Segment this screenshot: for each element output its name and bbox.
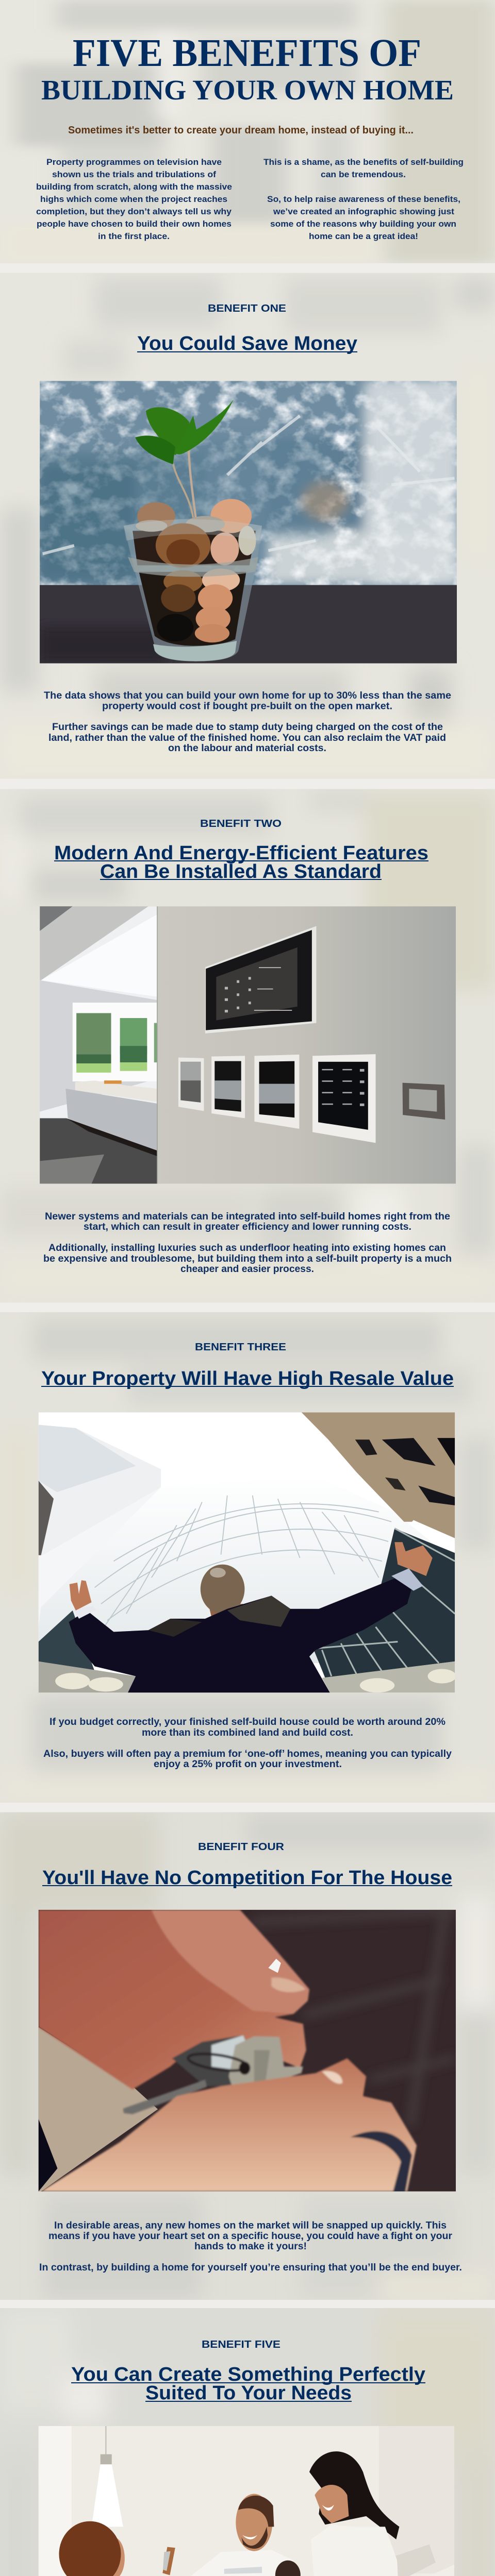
- photo: family sitting together on a bed: [39, 2426, 454, 2576]
- benefit one heading: You Could Save Money: [137, 333, 357, 354]
- benefit three text: Also, buyers will often pay a premium for ‘one-off’ homes, meaning you can typically: [43, 1748, 452, 1759]
- window: [73, 1003, 157, 1081]
- man: cuffs: [73, 1606, 96, 1619]
- benefit one text: on the labour and material costs.: [168, 742, 326, 754]
- faded house background: benefit three: [0, 1312, 495, 1803]
- benefit one text: Further savings can be made due to stamp duty being charged on the cost of the: [52, 721, 443, 733]
- benefit two text: start, which can result in greater efficiency and lower running costs.: [84, 1221, 411, 1232]
- intro text: left column: building from scratch, along with the massive: [36, 182, 232, 192]
- panel: introduction: [0, 0, 495, 263]
- photo: businessman with raised arms among tall buildings: [39, 1412, 456, 1692]
- benefit three text: enjoy a 25% profit on your investment.: [154, 1758, 342, 1770]
- man: hands: [70, 1580, 92, 1611]
- benefit three text: more than its combined land and build cost.: [142, 1727, 353, 1738]
- benefit five heading: Suited To Your Needs: [145, 2382, 352, 2404]
- sofa: [75, 1080, 157, 1102]
- title: FIVE BENEFITS OF: [73, 31, 421, 75]
- man: head: [208, 1604, 246, 1617]
- benefit five heading: [71, 2364, 425, 2404]
- panel: benefit five: [0, 2308, 495, 2576]
- benefit one text: land, rather than the value of the finished home. You can also reclaim the VAT paid: [48, 732, 446, 743]
- woman: hair: [309, 2451, 399, 2539]
- light fittings: [39, 1662, 136, 1692]
- benefit five heading: You Can Create Something Perfectly: [71, 2364, 425, 2385]
- benefit four heading: You'll Have No Competition For The House: [42, 1867, 452, 1889]
- glass of coins: [124, 518, 262, 661]
- lower hand: [41, 2058, 417, 2191]
- key: [229, 2036, 303, 2088]
- benefit two text: [43, 1211, 452, 1275]
- intro text: left column: people have chosen to build their own homes: [37, 219, 232, 229]
- benefit two label: BENEFIT TWO: [200, 818, 282, 829]
- faded house background: benefit four: [0, 1812, 495, 2300]
- benefit three heading: Your Property Will Have High Resale Value: [41, 1368, 454, 1389]
- intro text: right column: we’ve created an infographic showing just: [273, 207, 454, 216]
- benefit one text: property would cost if bought pre-built on the open market.: [102, 701, 392, 712]
- faded house background: benefit five: [0, 2308, 495, 2576]
- benefit two text: be expensive and troublesome, but building them into a self-built property is a much: [43, 1253, 452, 1264]
- benefit one text: The data shows that you can build your own home for up to 30% less than the same: [44, 690, 451, 701]
- intro text: left column: highs which come when the project reaches: [40, 194, 227, 204]
- benefit three text: If you budget correctly, your finished self-build house could be worth around 20%: [50, 1716, 446, 1727]
- photo: plant growing from a glass of coins: [40, 381, 458, 663]
- faded house background: benefit one: [0, 273, 495, 779]
- benefit two text: cheaper and easier process.: [180, 1263, 314, 1275]
- baby: [275, 2561, 301, 2576]
- man: torso: [189, 2550, 293, 2576]
- woman: face: [315, 2485, 349, 2523]
- upper hand: [39, 1910, 309, 2090]
- intro text: left column: completion, but they don’t always tell us why: [36, 207, 232, 216]
- stems: [173, 463, 193, 518]
- leaves: [146, 407, 189, 455]
- intro text: left column: [36, 157, 232, 241]
- pillows: [394, 2545, 436, 2576]
- benefit two heading: Can Be Installed As Standard: [100, 861, 382, 883]
- benefit four text: In contrast, by building a home for yourself you’re ensuring that you’ll be the end buyer.: [39, 2262, 462, 2273]
- floor: [40, 1118, 157, 1183]
- left tower: [39, 1425, 161, 1555]
- intro text: right column: home can be a great idea!: [309, 231, 418, 241]
- glass facade: [39, 1476, 455, 1663]
- panel: benefit one: [0, 273, 495, 779]
- faded house background: benefit two: [0, 789, 495, 1302]
- intro text: right column: some of the reasons why building your own: [270, 219, 456, 229]
- benefit one label: BENEFIT ONE: [208, 303, 286, 314]
- subtitle: Sometimes it's better to create your dream home, instead of buying it...: [68, 125, 414, 136]
- woman: dress: [281, 2524, 407, 2576]
- benefit four text: means if you have your heart set on a specific house, you could have a fight on your: [48, 2230, 452, 2242]
- intro text: right column: can be tremendous.: [321, 170, 406, 179]
- photo: smart home control panels on a wall: [40, 906, 456, 1183]
- intro text: right column: [263, 157, 464, 241]
- intro text: right column: This is a shame, as the benefits of self-building: [263, 157, 464, 167]
- benefit three text: [43, 1716, 452, 1770]
- intro text: right column: So, to help raise awareness of these benefits,: [267, 194, 460, 204]
- title: [41, 31, 454, 106]
- large wall panel: [205, 926, 316, 1033]
- benefit two heading: [54, 842, 428, 883]
- benefit three label: BENEFIT THREE: [195, 1342, 286, 1353]
- benefit four label: BENEFIT FOUR: [198, 1841, 285, 1853]
- dark glass: [312, 1528, 455, 1678]
- benefit two text: Newer systems and materials can be integrated into self-build homes right from the: [45, 1211, 450, 1222]
- intro text: left column: shown us the trials and tribulations of: [52, 170, 216, 179]
- title: BUILDING YOUR OWN HOME: [41, 74, 454, 106]
- tablets: [178, 1058, 204, 1111]
- faded house background: introduction: [0, 0, 495, 263]
- intro text: left column: Property programmes on television have: [46, 157, 222, 167]
- benefit four text: hands to make it yours!: [194, 2241, 307, 2252]
- right stone building: [302, 1412, 455, 1543]
- girl: head: [103, 2537, 125, 2576]
- panel: benefit four: [0, 1812, 495, 2300]
- man: head: [236, 2494, 272, 2551]
- intro text: left column: in the first place.: [98, 231, 170, 241]
- panel: benefit two: [0, 789, 495, 1302]
- benefit one text: [44, 690, 451, 754]
- panel: benefit three: [0, 1312, 495, 1803]
- benefit four text: [39, 2219, 462, 2273]
- man: jacket: [69, 1576, 412, 1692]
- benefit four text: In desirable areas, any new homes on the market will be snapped up quickly. This: [54, 2219, 447, 2231]
- lamp: [105, 2426, 106, 2455]
- benefit two text: Additionally, installing luxuries such as underfloor heating into existing homes can: [48, 1242, 446, 1253]
- photo: hands holding house keys: [39, 1910, 456, 2191]
- wall switch: [403, 1083, 445, 1120]
- benefit five label: BENEFIT FIVE: [202, 2339, 280, 2350]
- key fob: [172, 2036, 248, 2086]
- benefit two heading: Modern And Energy-Efficient Features: [54, 842, 428, 864]
